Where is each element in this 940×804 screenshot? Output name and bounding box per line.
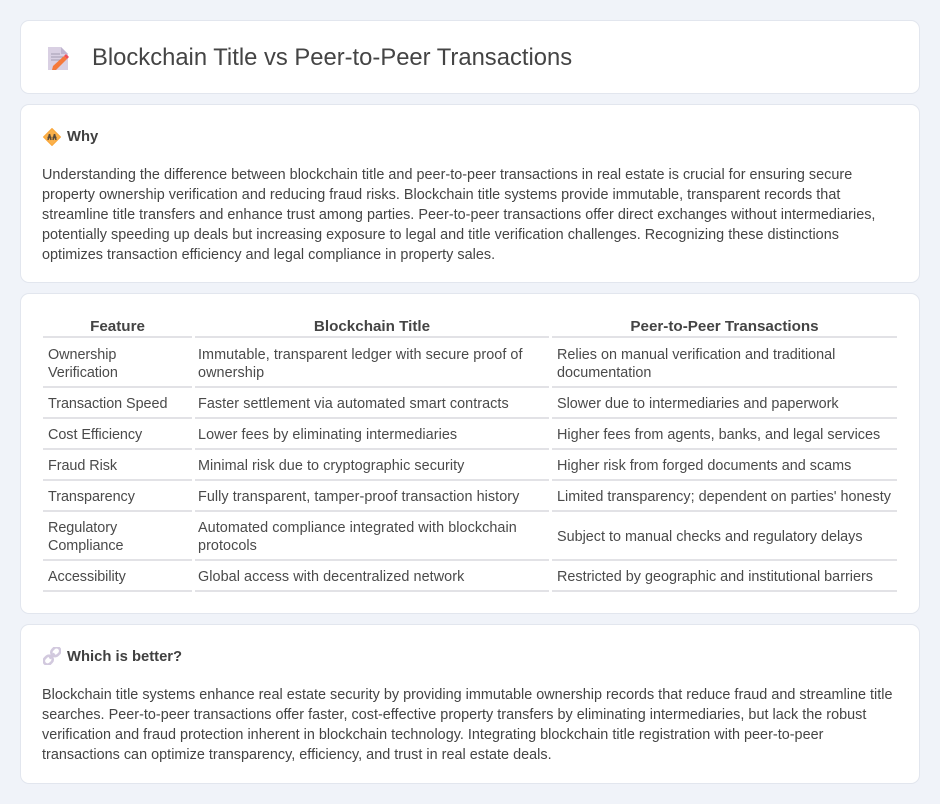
row: cost efficiency: Lower fees by eliminating intermediaries xyxy=(198,427,457,443)
icon: memo with pencil xyxy=(48,47,69,70)
text: why paragraph: streamline title transfers and enhance trust among parties. Peer-to-peer transactions offer direct exchanges without intermediaries, xyxy=(42,207,875,223)
row: fraud risk: Fraud Risk xyxy=(48,458,117,474)
title: Blockchain Title vs Peer-to-Peer Transactions xyxy=(92,44,572,71)
row: transparency: Transparency xyxy=(48,489,135,505)
row: ownership verification: Immutable, transparent ledger with secure proof of xyxy=(198,347,523,363)
row: cost efficiency: Higher fees from agents, banks, and legal services xyxy=(557,427,880,443)
row: fraud risk: Higher risk from forged documents and scams xyxy=(557,458,851,474)
row: regulatory compliance: Compliance xyxy=(48,538,124,554)
row: transaction speed: Transaction Speed xyxy=(48,396,167,412)
text: why paragraph: optimizes transaction efficiency and legal compliance in property sales. xyxy=(42,247,495,263)
row: regulatory compliance xyxy=(48,520,863,554)
text: which is better paragraph: Blockchain title systems enhance real estate security by providing immutable ownership records that reduce fraud and streamline title xyxy=(42,687,893,703)
row: ownership verification: ownership xyxy=(198,365,264,381)
row: transparency xyxy=(48,489,891,505)
row: ownership verification: Ownership xyxy=(48,347,116,363)
row: accessibility xyxy=(48,569,873,585)
panel: header xyxy=(20,20,920,94)
panel: comparison table xyxy=(20,293,920,614)
text: why paragraph: potentially speeding up deals but increasing exposure to legal and title verification challenges. Recognizing these distinctions xyxy=(42,227,839,243)
heading: which is better: Which is better? xyxy=(67,649,182,665)
row: regulatory compliance: Regulatory xyxy=(48,520,117,536)
icon: chain link xyxy=(43,647,61,665)
row: regulatory compliance: Subject to manual checks and regulatory delays xyxy=(557,529,863,545)
text: why paragraph: property ownership verification and reducing fraud risks. Blockchain title systems provide immutable, transparent records that xyxy=(42,187,840,203)
text: why paragraph: Understanding the difference between blockchain title and peer-to-peer transactions in real estate is crucial for ensuring secure xyxy=(42,167,852,183)
row: cost efficiency: Cost Efficiency xyxy=(48,427,142,443)
row: ownership verification: Relies on manual verification and traditional xyxy=(557,347,835,363)
text: why paragraph xyxy=(42,167,875,263)
text: which is better paragraph: searches. Peer-to-peer transactions offer faster, cost-effective property transfers by eliminating intermediaries, but lack the robust xyxy=(42,707,866,723)
panel: why xyxy=(20,104,920,283)
text: which is better paragraph: transactions can optimize transparency, efficiency, and trust in real estate deals. xyxy=(42,747,552,763)
text: which is better paragraph: verification and fraud protection inherent in blockchain technology. Integrating blockchain title registration with peer-to-peer xyxy=(42,727,823,743)
table header: feature: Feature xyxy=(90,318,145,335)
row: ownership verification: Verification xyxy=(48,365,118,381)
row: regulatory compliance: Automated compliance integrated with blockchain xyxy=(198,520,517,536)
panel: which is better xyxy=(20,624,920,784)
row: regulatory compliance: protocols xyxy=(198,538,257,554)
table header: peer-to-peer transactions: Peer-to-Peer Transactions xyxy=(630,318,819,335)
row: fraud risk: Minimal risk due to cryptographic security xyxy=(198,458,464,474)
row: ownership verification: documentation xyxy=(557,365,651,381)
row: cost efficiency xyxy=(48,427,880,443)
row: transaction speed: Slower due to intermediaries and paperwork xyxy=(557,396,839,412)
row: accessibility: Restricted by geographic and institutional barriers xyxy=(557,569,873,585)
table header: blockchain title: Blockchain Title xyxy=(314,318,430,335)
row: ownership verification xyxy=(48,347,835,381)
row: transaction speed: Faster settlement via automated smart contracts xyxy=(198,396,509,412)
row: accessibility: Global access with decentralized network xyxy=(198,569,464,585)
row: transaction speed xyxy=(48,396,839,412)
row: fraud risk xyxy=(48,458,851,474)
heading: why: Why xyxy=(67,129,98,145)
row: accessibility: Accessibility xyxy=(48,569,126,585)
row: transparency: Fully transparent, tamper-proof transaction history xyxy=(198,489,519,505)
row: transparency: Limited transparency; dependent on parties' honesty xyxy=(557,489,891,505)
text: which is better paragraph xyxy=(42,687,893,763)
icon: warning diamond xyxy=(43,128,61,146)
